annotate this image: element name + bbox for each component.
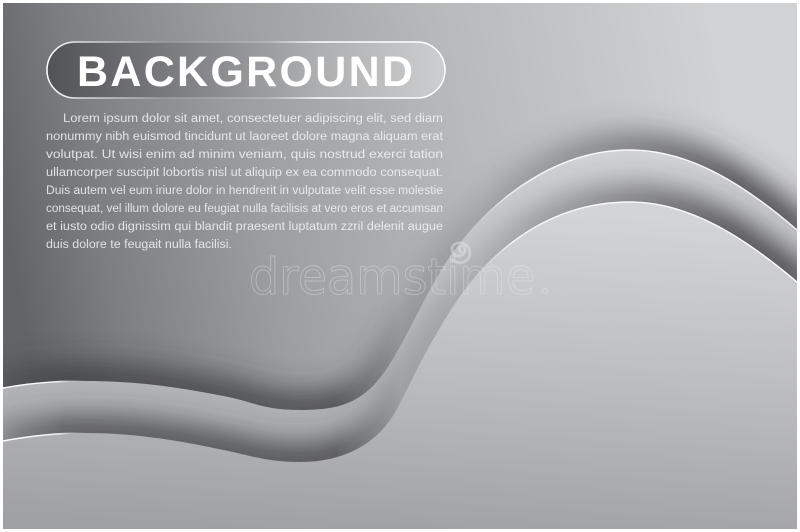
title pill — [47, 42, 445, 98]
shadow of upper wave — [0, 150, 800, 410]
shadow of lower wave — [0, 202, 800, 462]
watermark — [249, 243, 548, 306]
body text block: ullamcorper suscipit lobortis nisl ut aliquip ex ea commodo consequat. — [46, 167, 443, 179]
upper wave layer — [3, 150, 797, 458]
body text block: consequat, vel illum dolore eu feugiat nulla facilisis at vero eros et accumsan — [46, 203, 443, 215]
wave layers — [0, 150, 800, 529]
upper wave edge highlight — [3, 150, 797, 410]
body text block: nonummy nibh euismod tincidunt ut laoreet dolore magna aliquam erat — [46, 131, 444, 143]
lower wave layer — [3, 202, 797, 529]
watermark wordmark: dreamstime — [249, 248, 535, 306]
body text block — [46, 113, 444, 251]
body text block: volutpat. Ut wisi enim ad minim veniam, quis nostrud exerci tation — [46, 149, 443, 161]
lower wave edge highlight — [3, 202, 797, 462]
watermark spiral icon — [452, 243, 470, 263]
pill shape — [47, 42, 445, 98]
body text block: Duis autem vel eum iriure dolor in hendrerit in vulputate velit esse molestie — [46, 185, 443, 197]
body text block: Lorem ipsum dolor sit amet, consectetuer adipiscing elit, sed diam — [63, 113, 443, 125]
watermark dot — [542, 288, 548, 294]
body text block: duis dolore te feugait nulla facilisi. — [46, 239, 232, 251]
body text block: et iusto odio dignissim qui blandit praesent luptatum zzril delenit augue — [46, 221, 443, 233]
title text: BACKGROUND — [77, 48, 413, 96]
